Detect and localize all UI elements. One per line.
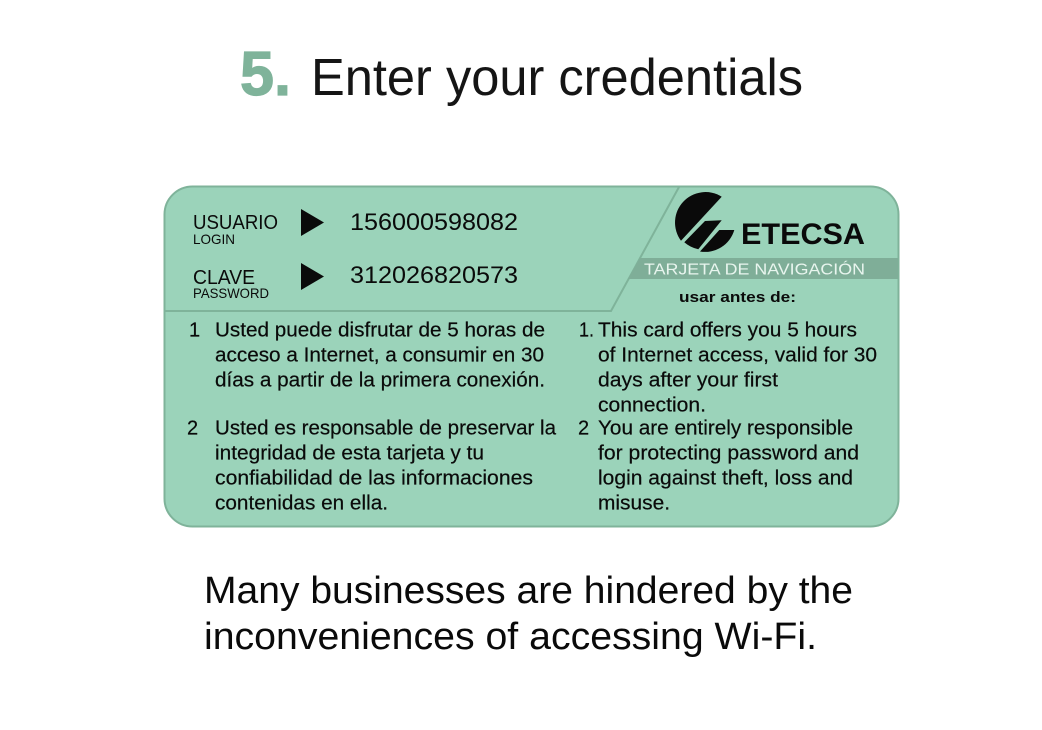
login row: LOGIN (193, 231, 235, 247)
text block: spanish terms: 1 (189, 320, 200, 342)
text block: english terms: 2 (578, 418, 589, 440)
login row (193, 209, 518, 247)
icon: arrow (301, 263, 324, 290)
text block: english terms: days after your first (598, 370, 778, 392)
caption (204, 570, 853, 658)
text block: spanish terms: 2 (187, 418, 198, 440)
text block: spanish terms: Usted puede disfrutar de 5 horas de (215, 320, 545, 342)
caption: inconveniences of accessing Wi-Fi. (204, 616, 817, 658)
login row: USUARIO (193, 212, 278, 234)
banner: tarjeta de navigación: TARJETA DE NAVIGACIÓN (644, 260, 865, 278)
card background (164, 186, 898, 526)
text block: english terms: This card offers you 5 hours (598, 320, 857, 342)
text block: english terms (578, 320, 877, 514)
icon: ETECSA logo (675, 192, 734, 252)
password row: 312026820573 (350, 262, 518, 289)
text block: english terms: misuse. (598, 492, 670, 514)
use-before label: usar antes de: (679, 289, 796, 306)
text block: spanish terms: integridad de esta tarjeta y tu (215, 442, 484, 464)
text block: spanish terms: contenidas en ella. (215, 492, 388, 514)
title: Enter your credentials (311, 49, 803, 107)
title: 5. (240, 40, 291, 109)
text block: english terms: connection. (598, 394, 706, 416)
text block: english terms: for protecting password and (598, 442, 859, 464)
password row (193, 262, 518, 301)
caption: Many businesses are hindered by the (204, 570, 853, 612)
icon: arrow (301, 209, 324, 236)
password row: CLAVE (193, 267, 255, 289)
text block: spanish terms: confiabilidad de las informaciones (215, 468, 533, 490)
login row: 156000598082 (350, 209, 518, 236)
banner: tarjeta de navigación (628, 258, 898, 279)
text block: english terms: of Internet access, valid for 30 (598, 344, 877, 366)
text block: spanish terms (187, 320, 557, 514)
text block: english terms: login against theft, loss and (598, 468, 853, 490)
text block: spanish terms: Usted es responsable de preservar la (215, 418, 557, 440)
text block: spanish terms: acceso a Internet, a consumir en 30 (215, 344, 544, 366)
password row: PASSWORD (193, 285, 269, 301)
text block: spanish terms: días a partir de la primera conexión. (215, 370, 545, 392)
panel: card (164, 186, 898, 526)
text block: english terms: 1. (579, 320, 594, 342)
card divider (165, 187, 679, 311)
text block: english terms: You are entirely responsible (598, 418, 853, 440)
logo wordmark: ETECSA (741, 218, 865, 251)
